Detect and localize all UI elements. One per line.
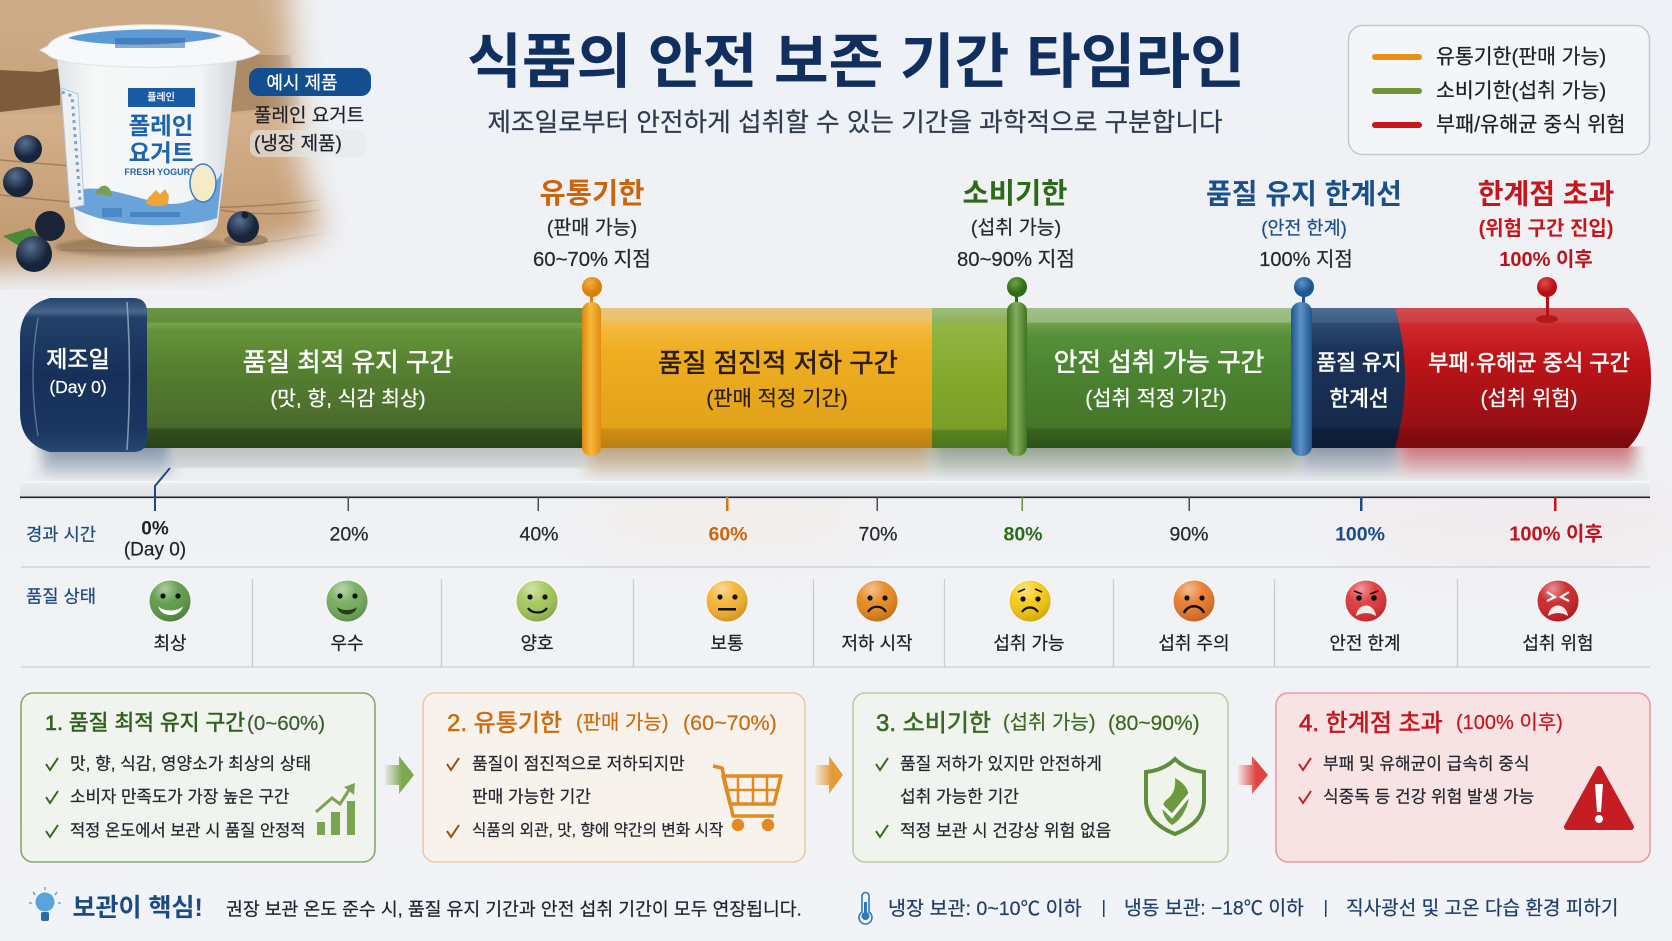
panel 4 heading: (100% 이후): [1456, 711, 1563, 734]
axis labels: 0%: [141, 518, 169, 540]
icon: rising bar chart: [316, 783, 355, 835]
panel 1 heading: 1. 품질 최적 유지 구간: [45, 711, 245, 735]
badge: example product: [249, 68, 371, 96]
quality state: edible: [993, 580, 1065, 654]
panel 1 bullets: 적정 온도에서 보관 시 품질 안정적: [70, 821, 305, 840]
timeline tube: [20, 277, 1651, 456]
quality state: decline begins: [841, 580, 913, 654]
quality state: excellent: 우수: [330, 634, 364, 654]
quality state: caution: [1158, 580, 1230, 654]
panel 3 heading: (80~90%): [1108, 712, 1200, 734]
callout: distribution period: 유통기한: [540, 178, 644, 210]
quality state: edible: 섭취 가능: [993, 634, 1065, 654]
segment: quality limit: 품질 유지: [1316, 351, 1402, 375]
legend item: danger: 부패/유해균 중식 위험: [1436, 114, 1626, 136]
legend: [1348, 26, 1650, 154]
quality state: safety limit: [1329, 580, 1401, 654]
icon: yogurt cup: [40, 25, 260, 247]
axis labels: 90%: [1169, 524, 1209, 546]
icon: warning triangle: [1567, 769, 1631, 827]
shadow under timeline tube: [20, 446, 1650, 482]
panel 1 bullets: 소비자 만족도가 가장 높은 구간: [70, 788, 289, 806]
product name: (냉장 제품): [254, 132, 342, 154]
panel 1 heading: (0~60%): [247, 712, 325, 734]
quality state: safety limit: 안전 한계: [1329, 634, 1401, 654]
footer: storage tip: 보관이 핵심!: [72, 894, 203, 922]
panel 4 bullets: 부패 및 유해균이 급속히 중식: [1323, 754, 1530, 774]
panel 4 bullets: [1299, 754, 1534, 806]
quality state: good: 양호: [520, 634, 554, 654]
panel 2 heading: (판매 가능): [576, 711, 668, 734]
arrow: panel 1 to 2: [385, 756, 414, 794]
callout: quality limit: 100% 지점: [1259, 248, 1353, 271]
segment: lime transition: [932, 308, 1012, 448]
axis labels: 80%: [1003, 524, 1043, 546]
icon: light bulb: [29, 887, 61, 921]
end cap: manufacture date: [20, 298, 147, 452]
icon: shopping cart: [713, 766, 781, 830]
panel 4: limit exceeded: [1276, 693, 1650, 862]
segment: optimal quality: [130, 308, 585, 448]
panel 1 bullets: 맛, 향, 식감, 영양소가 최상의 상태: [70, 754, 311, 774]
axis labels: 20%: [329, 524, 369, 546]
badge: example product: 예시 제품: [266, 73, 338, 93]
icon: thermometer: [859, 892, 872, 924]
arrow: panel 3 to 4: [1238, 756, 1268, 794]
callout: distribution period: (판매 가능): [547, 217, 637, 239]
segment: safe consumption: [1022, 308, 1297, 448]
panel 4 bullets: 식중독 등 건강 위험 발생 가능: [1323, 788, 1534, 806]
quality state: average: [706, 580, 748, 654]
segment: optimal quality: (맛, 향, 식감 최상): [270, 388, 426, 410]
segment: gradual decline: [598, 308, 933, 448]
panel 3 bullets: 품질 저하가 있지만 안전하게: [900, 754, 1102, 774]
segment: spoilage danger: 부패·유해균 중식 구간: [1428, 350, 1630, 376]
panel 2: distribution period: [423, 693, 805, 862]
callout: consumption period: 80~90% 지점: [957, 248, 1075, 271]
axis labels: 70%: [858, 524, 898, 546]
footer: storage temperatures: [859, 892, 1618, 924]
axis labels: 100% 이후: [1509, 522, 1603, 546]
panel 1: optimal quality zone: [21, 693, 375, 862]
time axis: [20, 468, 1650, 511]
callout: limit exceeded: (위험 구간 진입): [1479, 217, 1613, 240]
panel 1 bullets: [46, 754, 311, 840]
segment: quality limit: [1300, 308, 1415, 448]
axis labels: 60%: [708, 524, 748, 546]
subtitle: 제조일로부터 안전하게 섭취할 수 있는 기간을 과학적으로 구분합니다: [487, 108, 1223, 137]
footer: storage temperatures: 직사광선 및 고온 다습 환경 피하기: [1346, 898, 1618, 920]
segment: optimal quality: 품질 최적 유지 구간: [243, 348, 453, 377]
marker ring: 100%: [1291, 277, 1314, 456]
quality state: danger: [1522, 580, 1594, 654]
quality state: best: [149, 580, 191, 654]
icon: yogurt cup: 요거트: [129, 140, 193, 166]
panel 3: consumption period: [853, 693, 1228, 862]
callout: quality limit: [1206, 178, 1402, 271]
callout: consumption period: [957, 178, 1075, 271]
footer: storage temperatures: 냉장 보관: 0~10℃ 이하: [888, 898, 1082, 920]
callout: distribution period: 60~70% 지점: [533, 248, 651, 271]
panel 2 heading: 2. 유통기한: [447, 710, 562, 736]
callout: consumption period: 소비기한: [963, 178, 1067, 210]
segment: safe consumption: (섭취 적정 기간): [1085, 388, 1227, 410]
end cap: manufacture date: (Day 0): [49, 377, 107, 397]
quality state: caution: 섭취 주의: [1158, 634, 1230, 654]
legend item: distribution: 유통기한(판매 가능): [1436, 46, 1606, 68]
quality state: good: [516, 580, 558, 654]
axis labels: 100%: [1335, 524, 1385, 546]
callout: limit exceeded: [1478, 178, 1614, 271]
segment: gradual decline: 품질 점진적 저하 구간: [658, 348, 898, 378]
row label: quality state: 품질 상태: [26, 586, 96, 606]
icon: yogurt cup: FRESH YOGURT: [124, 167, 196, 177]
panel 3 bullets: [876, 754, 1111, 840]
product name: 풀레인 요거트: [254, 104, 364, 126]
segment: spoilage danger: [1395, 308, 1651, 448]
axis labels: 40%: [519, 524, 559, 546]
callout: distribution period: [533, 178, 651, 271]
segment: safe consumption: 안전 섭취 가능 구간: [1054, 348, 1264, 377]
callout: quality limit: 품질 유지 한계선: [1206, 178, 1402, 210]
quality state: best: 최상: [153, 634, 187, 654]
title: 식품의 안전 보존 기간 타임라인: [467, 28, 1245, 96]
footer: storage tip: [29, 887, 802, 922]
footer: storage tip: 권장 보관 온도 준수 시, 품질 유지 기간과 안전 섭취 기간이 모두 연장됩니다.: [226, 898, 802, 920]
callout: quality limit: (안전 한계): [1261, 218, 1347, 238]
icon: yogurt cup: 플레인: [147, 92, 175, 104]
marker pin: after 100%: [1536, 277, 1558, 323]
panel 2 bullets: 판매 가능한 기간: [472, 788, 591, 806]
callout: limit exceeded: 한계점 초과: [1478, 178, 1614, 210]
panel 3 bullets: 적정 보관 시 건강상 위험 없음: [900, 822, 1111, 840]
panel 2 heading: (60~70%): [683, 711, 777, 735]
row label: elapsed time: 경과 시간: [26, 524, 96, 544]
callout: consumption period: (섭취 가능): [971, 217, 1061, 239]
panel 4 heading: 4. 한계점 초과: [1299, 710, 1443, 736]
panel 3 bullets: 섭취 가능한 기간: [900, 788, 1019, 806]
quality state: decline begins: 저하 시작: [841, 634, 913, 654]
quality state: average: 보통: [710, 634, 744, 654]
panel 3 heading: 3. 소비기한: [876, 710, 991, 736]
segment: spoilage danger: (섭취 위험): [1480, 388, 1578, 410]
footer: storage temperatures: 냉동 보관: −18℃ 이하: [1124, 898, 1304, 920]
legend item: consumption: 소비기한(섭취 가능): [1436, 80, 1606, 102]
panel 2 bullets: [447, 754, 723, 840]
segment: gradual decline: (판매 적정 기간): [706, 388, 848, 410]
quality state: danger: 섭취 위험: [1522, 634, 1594, 654]
axis labels: (Day 0): [124, 540, 186, 560]
panel 2 bullets: 품질이 점진적으로 저하되지만: [472, 754, 685, 774]
arrow: panel 2 to 3: [815, 756, 843, 794]
panel 2 bullets: 식품의 외관, 맛, 향에 약간의 변화 시작: [472, 822, 723, 840]
icon: shield with check: [1146, 759, 1204, 834]
quality state: excellent: [326, 580, 368, 654]
icon: yogurt cup: 폴레인: [129, 113, 193, 139]
marker ring: 60%: [582, 277, 602, 456]
axis labels: [124, 518, 1603, 560]
callout: limit exceeded: 100% 이후: [1499, 248, 1593, 271]
marker ring: 80%: [1007, 277, 1027, 456]
end cap: manufacture date: 제조일: [46, 346, 110, 372]
segment: quality limit: 한계선: [1329, 387, 1389, 411]
product photo: yogurt cup on wooden table: [0, 0, 371, 290]
product name: [250, 104, 366, 157]
icon: blueberries: [3, 135, 268, 272]
panel 3 heading: (섭취 가능): [1003, 711, 1095, 734]
table lines: [21, 567, 1650, 667]
